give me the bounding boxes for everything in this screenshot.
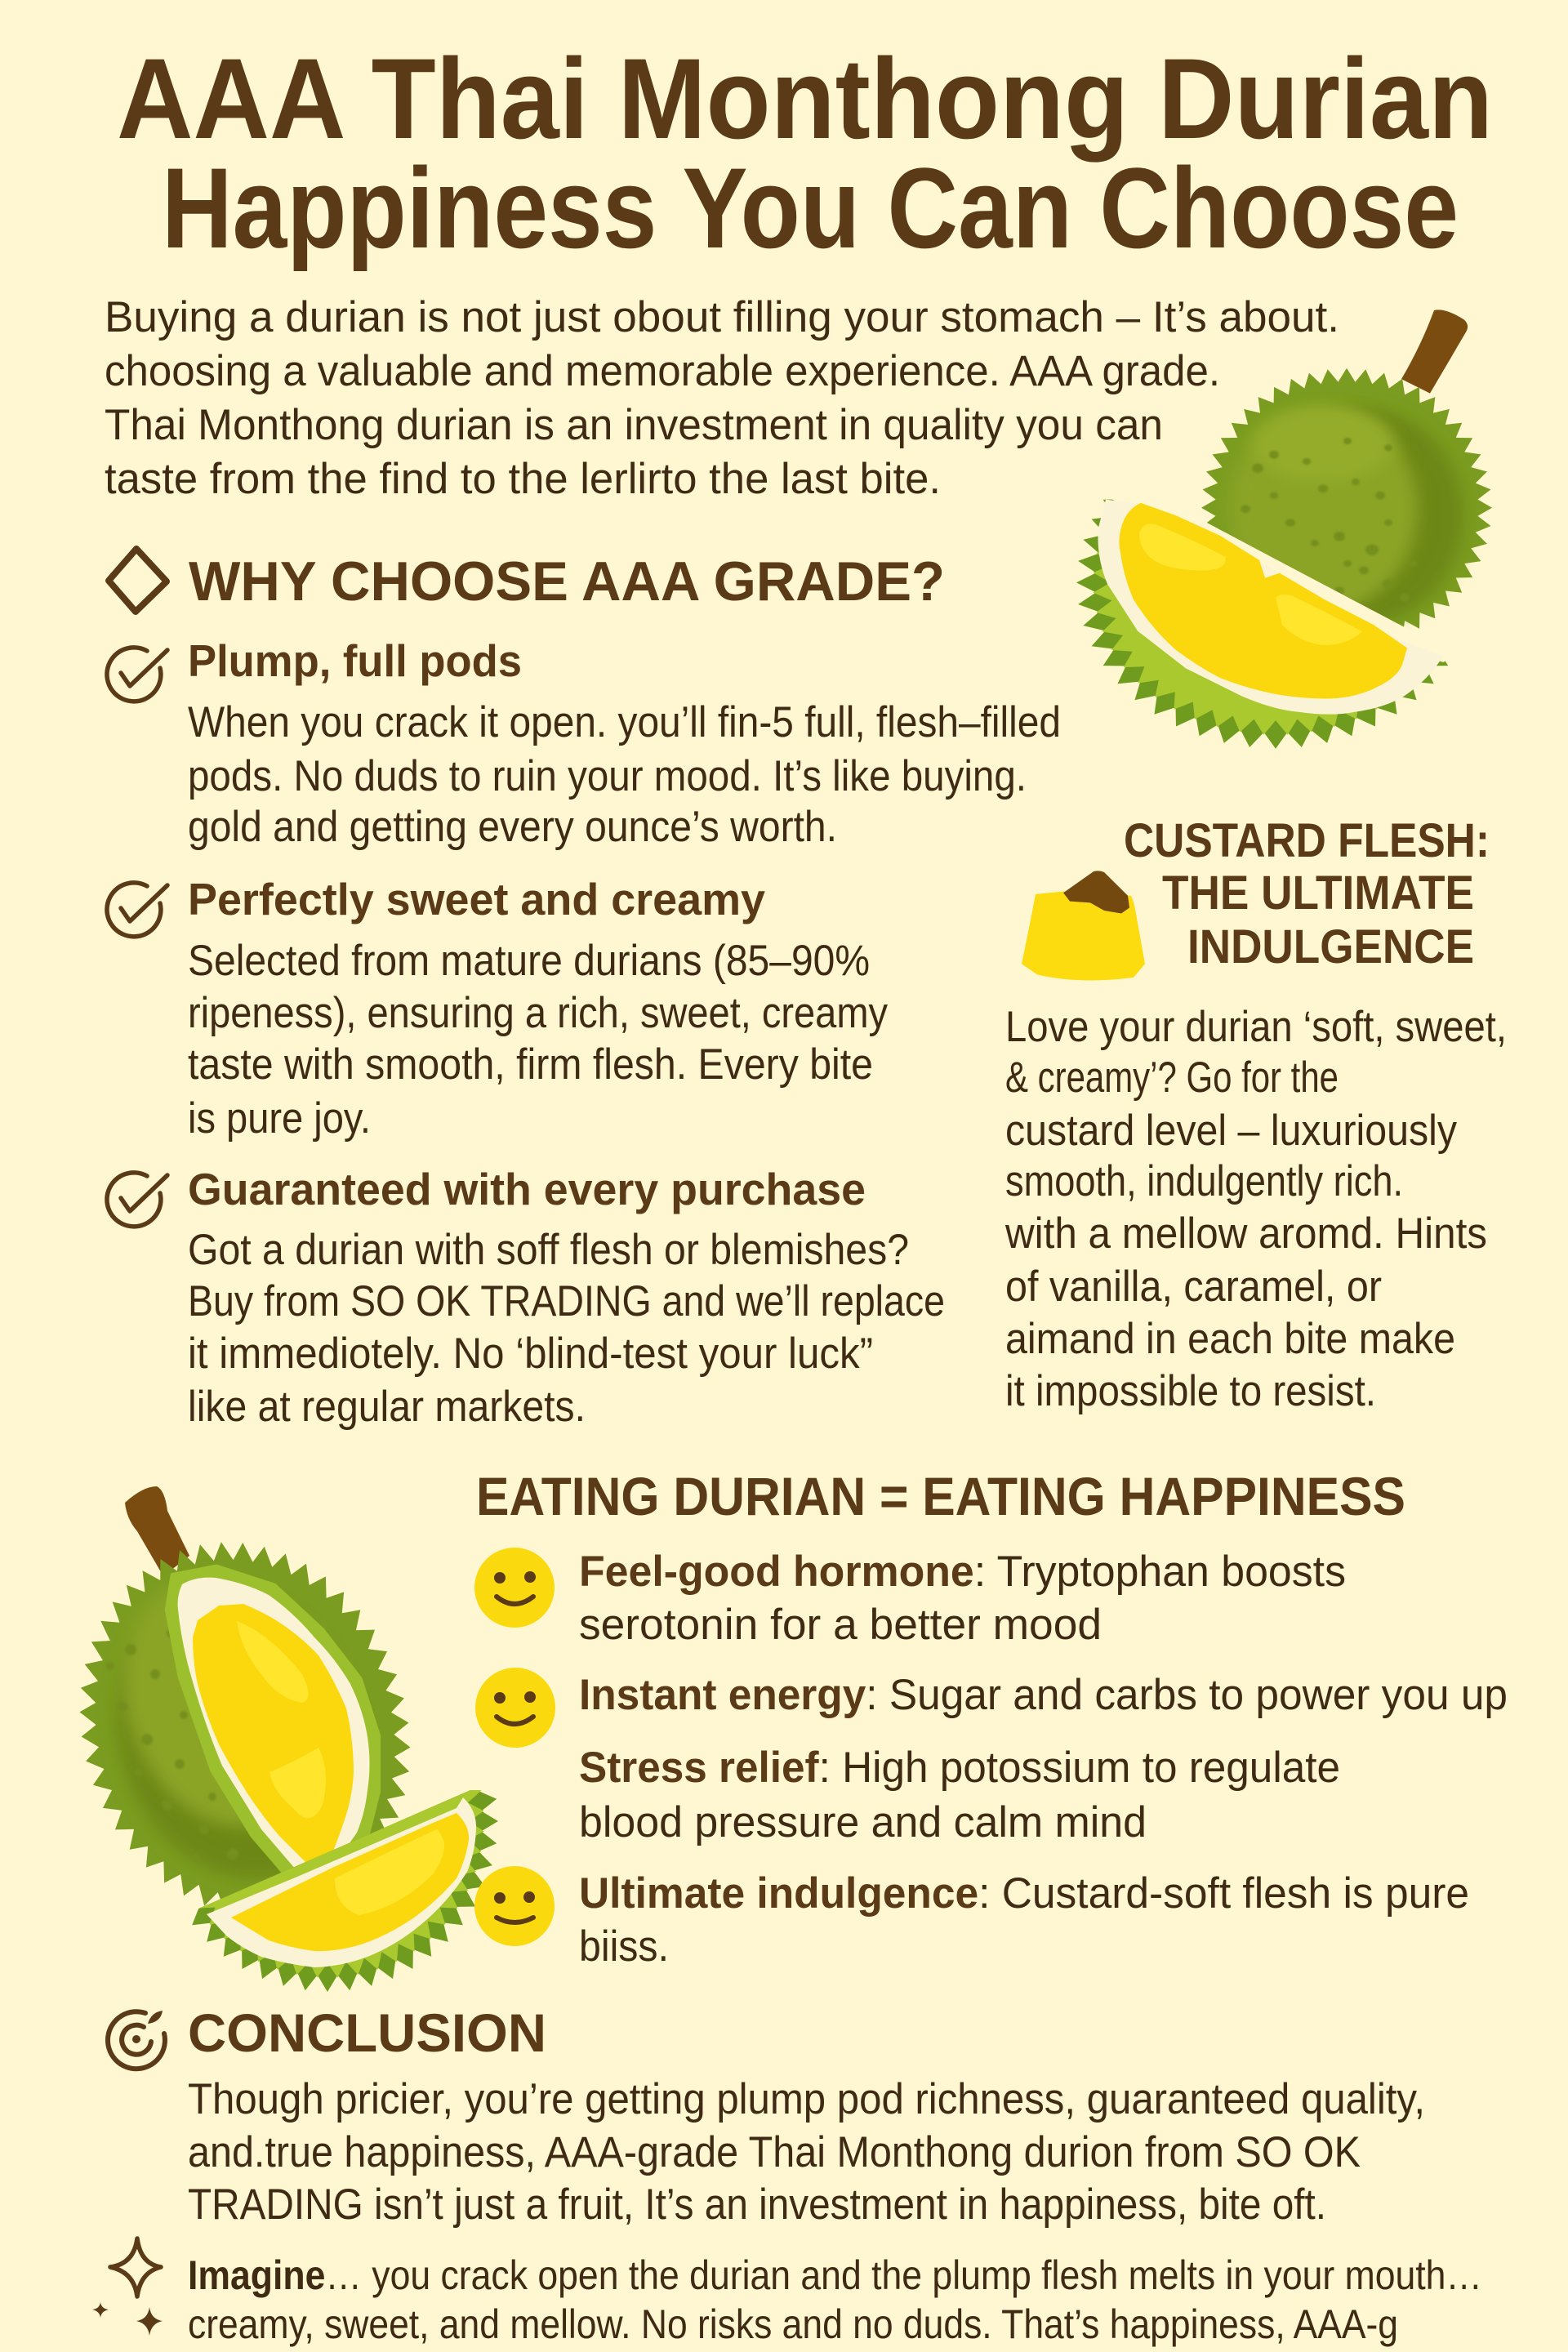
icon: smiley (475, 1668, 555, 1748)
benefit: perfectly sweet and creamy: ripeness), ensuring a rich, sweet, creamy (188, 989, 888, 1037)
benefit: perfectly sweet and creamy (107, 874, 888, 1143)
benefit: perfectly sweet and creamy: is pure joy. (188, 1094, 371, 1143)
panel: eating durian = eating happiness: blood pressure and calm mind (579, 1798, 1147, 1846)
panel: eating durian = eating happiness: Ultimate indulgence: Custard-soft flesh is pure (579, 1869, 1469, 1918)
panel: eating durian = eating happiness: biiss. (579, 1922, 669, 1971)
panel: eating durian = eating happiness: Instant energy: Sugar and carbs to power you up (579, 1671, 1508, 1719)
panel: custard flesh: & creamy’? Go for the (1005, 1054, 1339, 1102)
benefit: perfectly sweet and creamy: taste with smooth, firm flesh. Every bite (188, 1040, 873, 1089)
icon: smiley (474, 1866, 555, 1946)
icon: sparkles (92, 2238, 163, 2336)
flesh highlights (335, 1829, 444, 1915)
panel: conclusion: CONCLUSION (188, 2002, 546, 2063)
benefit: perfectly sweet and creamy: Perfectly sweet and creamy (188, 874, 765, 924)
durian pith (1098, 500, 1443, 715)
durian flesh (1119, 503, 1407, 698)
panel: eating durian = eating happiness: EATING DURIAN = EATING HAPPINESS (476, 1466, 1405, 1526)
panel: custard flesh: Love your durian ‘soft, sweet, (1005, 1003, 1507, 1051)
icon: check circle (107, 1173, 167, 1227)
benefit: plump, full pods: When you crack it open. you’ll fin-5 full, flesh–filled (188, 698, 1061, 746)
durian pith (178, 1578, 369, 1875)
husk wedge spikes (192, 1790, 498, 1992)
durian flesh (231, 1813, 469, 1951)
icon: custard (1022, 871, 1145, 980)
panel: custard flesh: with a mellow aromd. Hints (1004, 1209, 1487, 1258)
flesh highlights (1139, 524, 1362, 645)
icon: target with leaf (108, 2011, 165, 2069)
panel: conclusion: TRADING isn’t just a fruit, It’s an investment in happiness, bite oft. (188, 2180, 1326, 2229)
icon: smiley (474, 1548, 555, 1628)
intro text block: choosing a valuable and memorable experience. AAA grade. (105, 347, 1220, 395)
panel: custard flesh (1004, 814, 1507, 1415)
intro text block: Buying a durian is not just obout filling your stomach – It’s about. (105, 293, 1339, 341)
panel: eating durian = eating happiness: serotonin for a better mood (579, 1601, 1102, 1649)
benefit: guaranteed with every purchase: like at regular markets. (188, 1383, 586, 1431)
benefit: plump, full pods (107, 635, 1061, 851)
panel: conclusion: Though pricier, you’re getting plump pod richness, guaranteed quality, (188, 2075, 1425, 2123)
benefit: plump, full pods: Plump, full pods (188, 635, 522, 686)
intro text block: Thai Monthong durian is an investment in quality you can (105, 401, 1163, 449)
icon: check circle (107, 648, 167, 702)
title: AAA Thai Monthong Durian (117, 34, 1493, 163)
icon: durian stem (125, 1486, 189, 1576)
panel: custard flesh: of vanilla, caramel, or (1005, 1263, 1382, 1311)
benefit: perfectly sweet and creamy: Selected from mature durians (85–90% (188, 937, 870, 985)
husk wedge spikes (1076, 500, 1449, 749)
panel: custard flesh: THE ULTIMATE (1162, 866, 1474, 920)
panel: eating durian = eating happiness: Stress relief: High potossium to regulate (579, 1744, 1340, 1792)
panel: custard flesh: INDULGENCE (1187, 920, 1474, 973)
benefit: guaranteed with every purchase (107, 1164, 945, 1431)
durian husk (1201, 368, 1492, 629)
inner husk (178, 1578, 368, 1875)
illustration: opened durian bottom left (80, 1486, 498, 1992)
benefit: guaranteed with every purchase: Guaranteed with every purchase (188, 1164, 866, 1214)
intro text block (105, 293, 1339, 503)
closing text: imagine (92, 2238, 1482, 2347)
panel: custard flesh: it impossible to resist. (1005, 1367, 1376, 1415)
panel: custard flesh: CUSTARD FLESH: (1124, 814, 1490, 867)
title (117, 34, 1493, 272)
intro text block: taste from the find to the lerlirto the last bite. (105, 455, 941, 503)
panel: conclusion: and.true happiness, AAA-grade Thai Monthong durion from SO OK (188, 2128, 1361, 2176)
panel: custard flesh: aimand in each bite make (1005, 1315, 1455, 1363)
icon: check circle (107, 883, 167, 937)
durian flesh (193, 1604, 354, 1864)
benefit: guaranteed with every purchase: Buy from SO OK TRADING and we’ll replace (188, 1277, 945, 1325)
durian husk (0, 1402, 551, 2107)
panel: custard flesh: smooth, indulgently rich. (1005, 1157, 1403, 1205)
icon: diamond (109, 549, 167, 612)
heading: why choose AAA grade: WHY CHOOSE AAA GRADE? (189, 550, 945, 612)
benefit: guaranteed with every purchase: it immediotely. No ‘blind-test your luck” (188, 1330, 873, 1378)
flesh highlights (237, 1621, 326, 1818)
icon: durian stem (1401, 310, 1468, 394)
benefit: plump, full pods: gold and getting every ounce’s worth. (188, 803, 837, 851)
panel: conclusion (108, 2002, 1425, 2229)
panel: custard flesh: custard level – luxuriously (1005, 1107, 1457, 1155)
benefit: guaranteed with every purchase: Got a durian with soff flesh or blemishes? (188, 1226, 909, 1274)
panel: eating durian = eating happiness: Feel-good hormone: Tryptophan boosts (579, 1548, 1346, 1596)
closing text: imagine: creamy, sweet, and mellow. No risks and no duds. That’s happiness, AAA-g (188, 2301, 1398, 2347)
durian pith (207, 1797, 476, 1967)
benefit: plump, full pods: pods. No duds to ruin your mood. It’s like buying. (188, 752, 1027, 800)
panel: eating durian = eating happiness (474, 1466, 1508, 1971)
illustration: opened durian top right (1076, 310, 1492, 749)
